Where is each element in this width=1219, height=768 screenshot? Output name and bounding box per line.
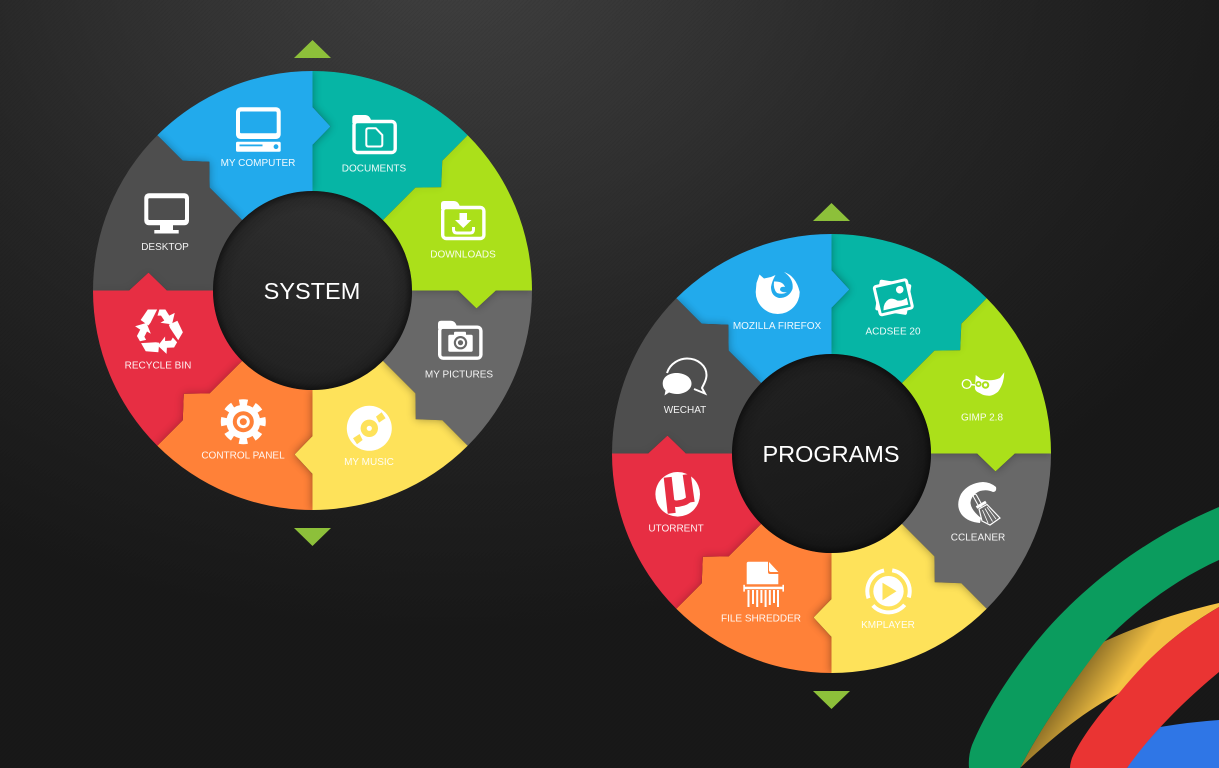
centre hub: system [213,191,412,390]
label: kmplayer: KMPLAYER [861,620,915,631]
arrow up: system [294,40,331,58]
segments: system [93,71,532,510]
arrow up: programs [813,203,850,221]
icon: documents [352,115,395,152]
label: utorrent: UTORRENT [648,524,704,534]
segment: downloads [383,135,532,308]
blue ribbon [1127,720,1219,768]
red ribbon [1070,607,1219,768]
icon: kmplayer [864,567,913,616]
segment: wechat [612,298,761,454]
segment: gimp [902,298,1051,472]
label: my music: MY MUSIC [344,457,394,468]
green ribbon [969,507,1219,768]
label: file shredder: FILE SHREDDER [721,613,801,624]
label: my pictures: MY PICTURES [425,370,493,380]
icon: control panel [221,399,266,444]
icon: recycle bin [132,310,186,357]
segment: utorrent [612,436,761,609]
segment: my pictures [383,290,532,446]
segment: my computer [157,71,330,220]
icon: utorrent [655,472,700,517]
segment: ccleaner [902,454,1051,609]
icon: my computer [236,107,281,152]
segment: my music [294,360,468,510]
icon: gimp [962,372,1004,396]
label: documents: DOCUMENTS [342,164,407,174]
label: gimp: GIMP 2.8 [961,412,1003,424]
icon: my music [347,406,392,451]
yellow ribbon [1020,603,1219,768]
segment: acdsee [832,234,987,383]
segment: mozilla firefox [676,234,850,383]
label: downloads: DOWNLOADS [430,250,496,260]
arrow down: programs [813,691,850,709]
segment: documents [312,71,468,220]
wheel: programs [612,203,1051,709]
segment: file shredder [676,524,832,673]
label: mozilla firefox: MOZILLA FIREFOX [733,321,822,332]
label: ccleaner: CCLEANER [951,532,1005,544]
segment: recycle bin [93,272,242,446]
icon: wechat [663,358,706,396]
title: system: SYSTEM [264,278,360,304]
label: wechat: WECHAT [664,405,706,416]
wheel: system [0,0,655,633]
segments: programs [612,234,1051,673]
icon: acdsee [874,279,913,315]
segment: desktop [93,135,242,290]
segment: kmplayer [814,524,987,673]
icon: downloads [441,201,484,238]
centre hub: programs [732,354,931,553]
corner ribbons [969,507,1219,768]
icon: my pictures [438,321,481,358]
icon: mozilla firefox [756,272,800,314]
label: control panel: CONTROL PANEL [201,450,285,461]
segment: control panel [157,361,312,510]
icon: file shredder [743,562,784,607]
label: my computer: MY COMPUTER [221,158,295,169]
icon: desktop [144,193,189,234]
label: acdsee: ACDSEE 20 [865,326,921,338]
arrow down: system [294,528,331,546]
icon: ccleaner [958,482,1000,525]
label: recycle bin: RECYCLE BIN [125,360,191,372]
title: programs: PROGRAMS [762,441,900,467]
label: desktop: DESKTOP [141,242,189,253]
